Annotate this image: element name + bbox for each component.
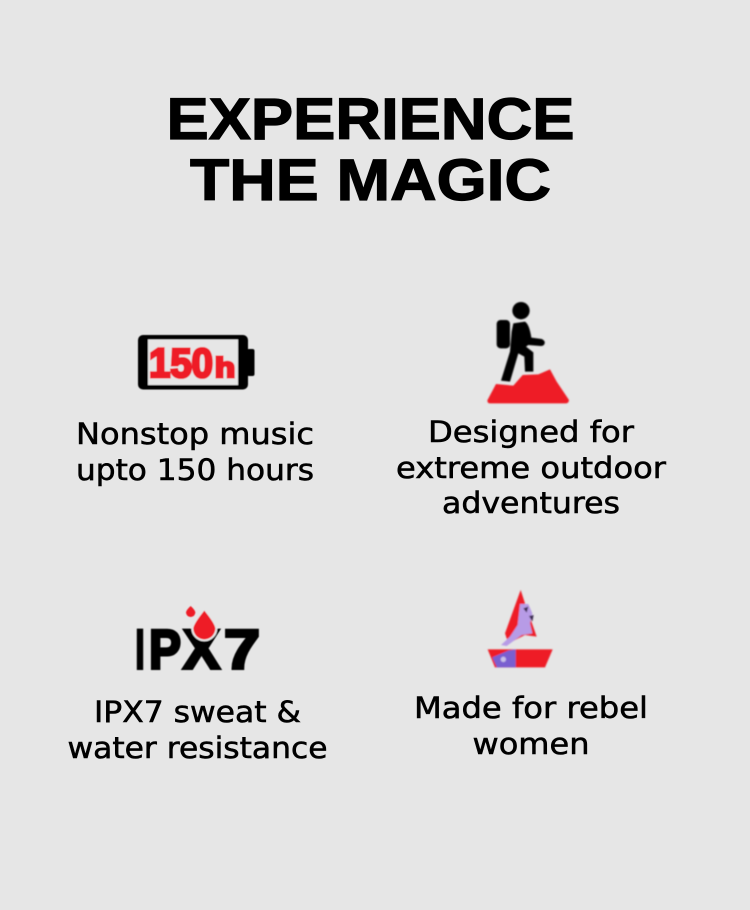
text: designed for xyxy=(396,415,666,520)
icon: IPX7 with drops: X xyxy=(183,618,220,680)
icon: battery 150h: 150 xyxy=(149,340,213,386)
panel: battery life xyxy=(76,335,314,487)
title: EXPERIENCE xyxy=(166,87,574,152)
panel: rebel women xyxy=(414,590,648,761)
text: IPX7 sweat: IPX7 sweat & xyxy=(94,695,301,729)
text: nonstop music xyxy=(76,417,314,487)
icon: IPX7 with drops: I xyxy=(136,618,144,680)
text: made for rebel: Made for rebel xyxy=(414,691,648,725)
title: THE MAGIC xyxy=(190,148,551,213)
text: IPX7 sweat xyxy=(68,695,328,765)
text: designed for: Designed for xyxy=(428,415,634,449)
icon: battery 150h xyxy=(138,335,254,390)
icon: battery 150h: h xyxy=(215,352,235,383)
icon: IPX7 with drops xyxy=(136,606,260,680)
text: IPX7 sweat: water resistance xyxy=(68,731,328,765)
title xyxy=(166,87,574,213)
icon: IPX7 with drops: P xyxy=(149,618,181,680)
panel: water resistance xyxy=(68,606,328,765)
text: designed for: extreme outdoor xyxy=(396,451,666,485)
text: nonstop music: upto 150 hours xyxy=(76,453,314,487)
text: nonstop music: Nonstop music xyxy=(76,417,314,451)
panel: outdoor adventures xyxy=(396,302,666,520)
text: designed for: adventures xyxy=(442,486,620,520)
text: made for rebel: women xyxy=(472,727,590,761)
icon: IPX7 with drops: 7 xyxy=(224,618,260,680)
text: made for rebel xyxy=(414,691,648,761)
icon: hiker on mountain xyxy=(487,302,569,403)
icon: pixelated boat figure xyxy=(488,590,553,667)
